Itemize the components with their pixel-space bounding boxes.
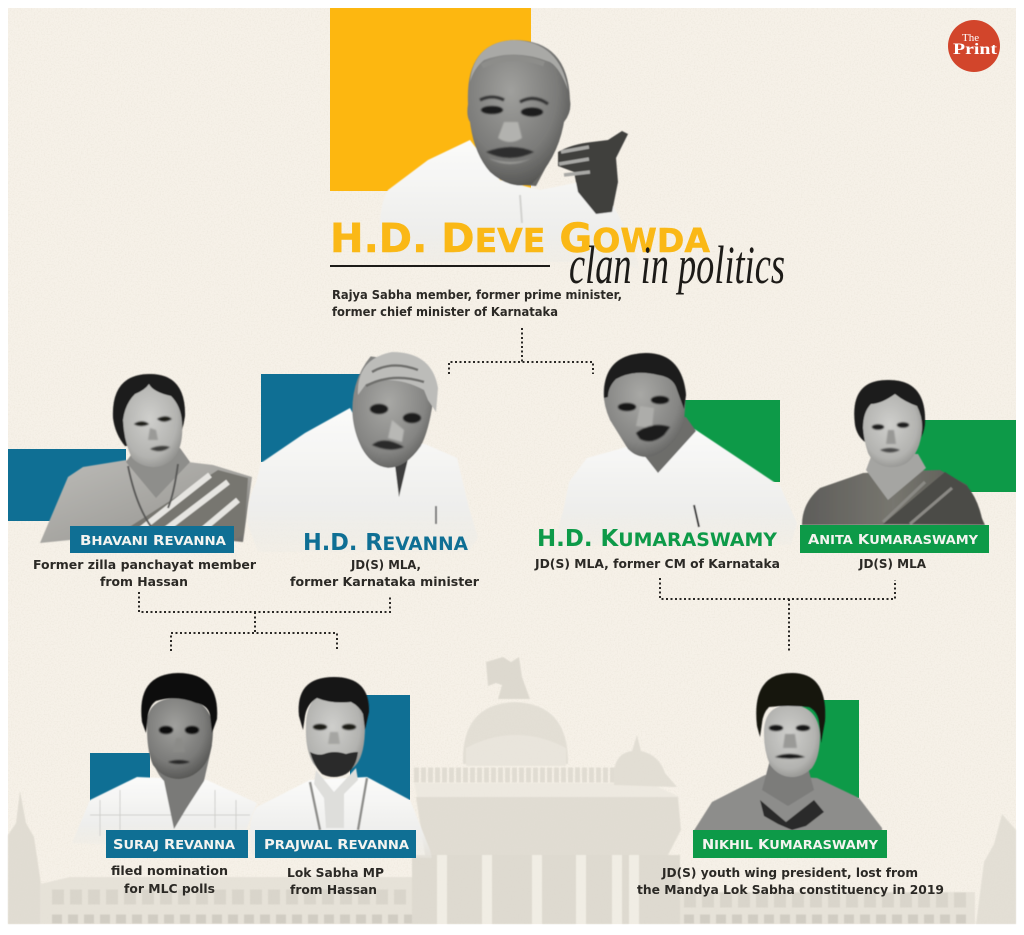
text: Prajwal description: from Hassan: [290, 882, 377, 897]
colour block: green Nikhil: [800, 700, 859, 798]
portrait: Bhavani Revanna: [40, 374, 252, 544]
text: Suraj description: [111, 863, 228, 896]
text: Revanna description: [290, 557, 480, 589]
portrait: Anita Kumaraswamy: [802, 380, 985, 525]
text: Anita description: JD(S) MLA: [858, 556, 926, 571]
building: lower storey: [412, 855, 680, 924]
logo: ThePrint: [948, 20, 1000, 72]
building: left tower: [8, 791, 46, 924]
colour block: green Kumaraswamy: [680, 400, 780, 482]
label: Suraj Revanna: SURAJ REVANNA: [113, 837, 236, 853]
building: balustrade: [414, 768, 645, 782]
colour block: green Anita: [910, 420, 1016, 492]
description: Deve Gowda: Rajya Sabha member, former prime minister,: [332, 287, 622, 302]
text: Revanna description: former Karnataka minister: [290, 574, 480, 589]
connector: Deve Gowda to sons: [449, 328, 593, 374]
label: Suraj Revanna: [106, 830, 248, 858]
title: H.D. Deve Gowda: H.D. DEVE GOWDA: [330, 216, 710, 262]
label: Prajwal Revanna: [255, 830, 416, 858]
building: wing windows and arches: [52, 897, 972, 900]
text: Suraj description: filed nomination: [111, 863, 228, 878]
portrait: Prajwal Revanna: [250, 677, 432, 858]
colour block: blue Suraj: [90, 753, 150, 801]
text: Bhavani description: from Hassan: [100, 574, 188, 589]
colour block: yellow: [330, 8, 531, 191]
label: Nikhil Kumaraswamy: NIKHIL KUMARASWAMY: [702, 837, 878, 853]
connector: Kumaraswamy couple to son: [660, 578, 895, 653]
portrait: Nikhil Kumaraswamy: [693, 673, 882, 834]
text: Nikhil description: the Mandya Lok Sabha constituency in 2019: [637, 882, 944, 897]
label: Anita Kumaraswamy: ANITA KUMARASWAMY: [808, 532, 978, 548]
building: columns: [442, 855, 634, 924]
portrait: H.D. Revanna: [248, 352, 478, 552]
building: roof band: [414, 783, 680, 797]
text: Revanna description: JD(S) MLA,: [350, 557, 421, 572]
text: Kumaraswamy description: JD(S) MLA, former CM of Karnataka: [534, 556, 780, 571]
description: Deve Gowda: former chief minister of Karnataka: [332, 304, 558, 319]
text: Bhavani description: [33, 557, 257, 589]
text: Prajwal description: Lok Sabha MP: [287, 865, 384, 880]
portrait: H.D. Kumaraswamy: [556, 353, 797, 545]
title rule: [330, 265, 550, 267]
building: right tower: [976, 814, 1016, 924]
description: Deve Gowda: [332, 287, 622, 319]
label: Bhavani Revanna: [70, 526, 234, 553]
connector: Revanna couple to sons: [139, 592, 390, 651]
portrait: Suraj Revanna: [72, 673, 257, 845]
building: dome: [463, 702, 568, 764]
building: side dome: [614, 735, 677, 787]
subtitle script: clan in politics: clan in politics: [569, 235, 785, 295]
text: Suraj description: for MLC polls: [124, 881, 215, 896]
text: Nikhil description: JD(S) youth wing president, lost from: [661, 865, 918, 880]
label: Bhavani Revanna: BHAVANI REVANNA: [80, 533, 227, 549]
building: left wing: [40, 877, 412, 924]
building: upper storey: [416, 797, 681, 855]
background: Vidhana Soudha building illustration: [8, 657, 1016, 924]
text: Bhavani description: Former zilla panchayat member: [33, 557, 257, 572]
portrait: H.D. Deve Gowda: [380, 40, 640, 270]
logo: ThePrint: The: [962, 32, 979, 44]
logo: ThePrint: Print: [953, 41, 998, 58]
colour block: blue Revanna: [261, 374, 361, 462]
text: Prajwal description: [287, 865, 384, 897]
building: statue and flag: [486, 657, 530, 699]
label: Nikhil Kumaraswamy: [693, 830, 887, 858]
label: Anita Kumaraswamy: [800, 525, 989, 553]
name: H.D. Revanna: H.D. REVANNA: [303, 530, 468, 556]
label: Prajwal Revanna: PRAJWAL REVANNA: [264, 837, 410, 853]
colour block: blue Bhavani: [8, 449, 126, 521]
text: Nikhil description: [637, 865, 944, 897]
building: dome band: [466, 735, 566, 766]
colour block: blue Prajwal: [350, 695, 410, 800]
building: wing arches: [52, 914, 972, 924]
building: right wing: [680, 892, 975, 924]
name: H.D. Kumaraswamy: H.D. KUMARASWAMY: [537, 526, 777, 552]
